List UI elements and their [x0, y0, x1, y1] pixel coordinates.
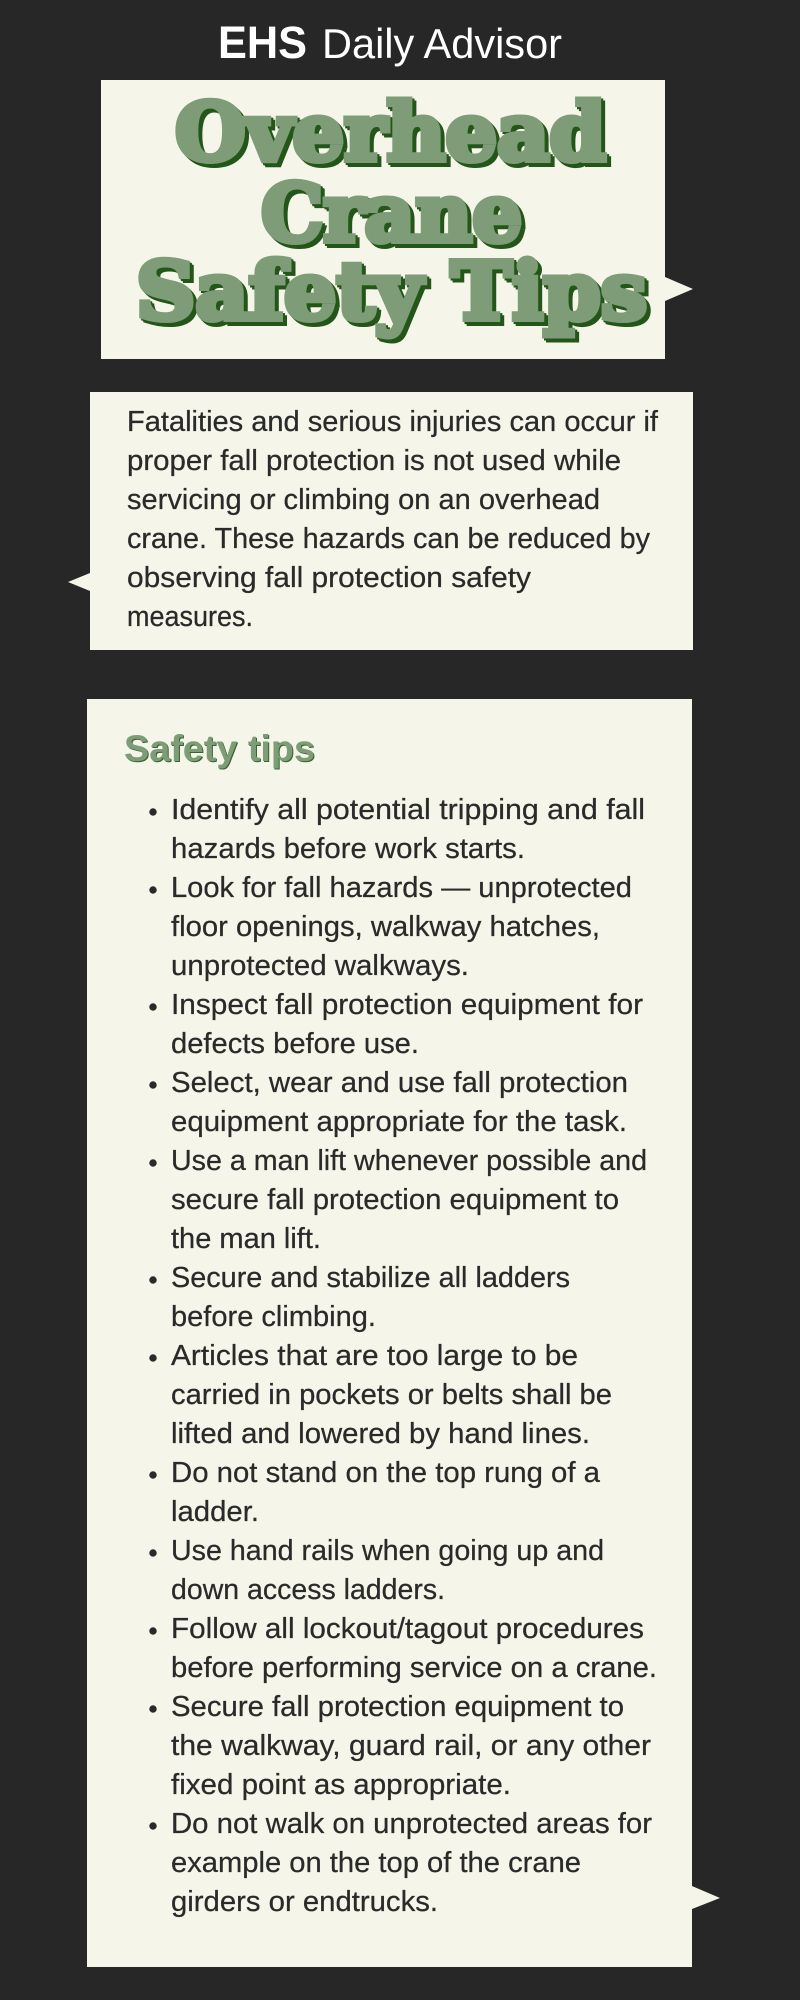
tip 1	[149, 794, 645, 865]
tip 7: carried in pockets or belts shall be	[171, 1379, 612, 1411]
header: EHS Daily Advisor logo: Daily Advisor	[322, 20, 562, 67]
bulleted tips list	[149, 794, 657, 1918]
tip 8: ladder.	[171, 1496, 259, 1528]
panel: title callout	[101, 80, 693, 359]
tip 8	[149, 1457, 601, 1528]
tip 3: Inspect fall protection equipment for	[171, 989, 643, 1021]
tip 12: girders or endtrucks.	[171, 1886, 438, 1918]
tip 11: the walkway, guard rail, or any other	[171, 1730, 651, 1762]
tip 5	[149, 1145, 647, 1255]
intro text: Fatalities and serious injuries can occur if	[127, 406, 659, 438]
tip 1: Identify all potential tripping and fall	[171, 794, 645, 826]
intro text: proper fall protection is not used while	[127, 445, 621, 477]
tip 2: unprotected walkways.	[171, 950, 469, 982]
intro text: observing fall protection safety	[127, 562, 532, 594]
tip 7	[149, 1340, 612, 1450]
heading: Safety tips: Safety tips	[124, 728, 315, 769]
tip 4	[149, 1067, 628, 1138]
header: EHS Daily Advisor logo	[218, 17, 562, 68]
tip 6: before climbing.	[171, 1301, 376, 1333]
header: EHS Daily Advisor logo: EHS	[218, 17, 307, 68]
tip 4: Select, wear and use fall protection	[171, 1067, 628, 1099]
panel: introduction callout	[68, 392, 693, 650]
tip 9: down access ladders.	[171, 1574, 445, 1606]
tip 3	[149, 989, 643, 1060]
tip 9	[149, 1535, 604, 1606]
tip 4: equipment appropriate for the task.	[171, 1106, 627, 1138]
tip 11: Secure fall protection equipment to	[171, 1691, 624, 1723]
tip 10: Follow all lockout/tagout procedures	[171, 1613, 644, 1645]
intro text	[127, 406, 659, 633]
title: Overhead Crane Safety Tips: Safety Tips	[136, 244, 647, 338]
tip 5: Use a man lift whenever possible and	[171, 1145, 647, 1177]
tip 8: Do not stand on the top rung of a	[171, 1457, 601, 1489]
tip 10	[149, 1613, 657, 1684]
tip 9: Use hand rails when going up and	[171, 1535, 604, 1567]
tip 7: Articles that are too large to be	[171, 1340, 578, 1372]
tip 3: defects before use.	[171, 1028, 419, 1060]
intro text: servicing or climbing on an overhead	[127, 484, 600, 516]
tip 11: fixed point as appropriate.	[171, 1769, 511, 1801]
tip 2: floor openings, walkway hatches,	[171, 911, 600, 943]
tip 2: Look for fall hazards — unprotected	[171, 872, 632, 904]
tip 6	[149, 1262, 570, 1333]
panel: safety tips	[87, 699, 720, 1967]
tip 7: lifted and lowered by hand lines.	[171, 1418, 590, 1450]
tip 12: example on the top of the crane	[171, 1847, 581, 1879]
tip 6: Secure and stabilize all ladders	[171, 1262, 570, 1294]
intro text: measures.	[127, 601, 253, 633]
tip 12: Do not walk on unprotected areas for	[171, 1808, 652, 1840]
tip 10: before performing service on a crane.	[171, 1652, 657, 1684]
tip 5: the man lift.	[171, 1223, 321, 1255]
intro text: crane. These hazards can be reduced by	[127, 523, 650, 555]
title: Overhead Crane Safety Tips: Overhead	[175, 85, 606, 179]
tip 5: secure fall protection equipment to	[171, 1184, 619, 1216]
tip 12	[149, 1808, 652, 1918]
tip 11	[149, 1691, 651, 1801]
tip 2	[149, 872, 632, 982]
title: Overhead Crane Safety Tips	[136, 85, 647, 338]
tip 1: hazards before work starts.	[171, 833, 525, 865]
title: Overhead Crane Safety Tips: Crane	[261, 166, 522, 260]
